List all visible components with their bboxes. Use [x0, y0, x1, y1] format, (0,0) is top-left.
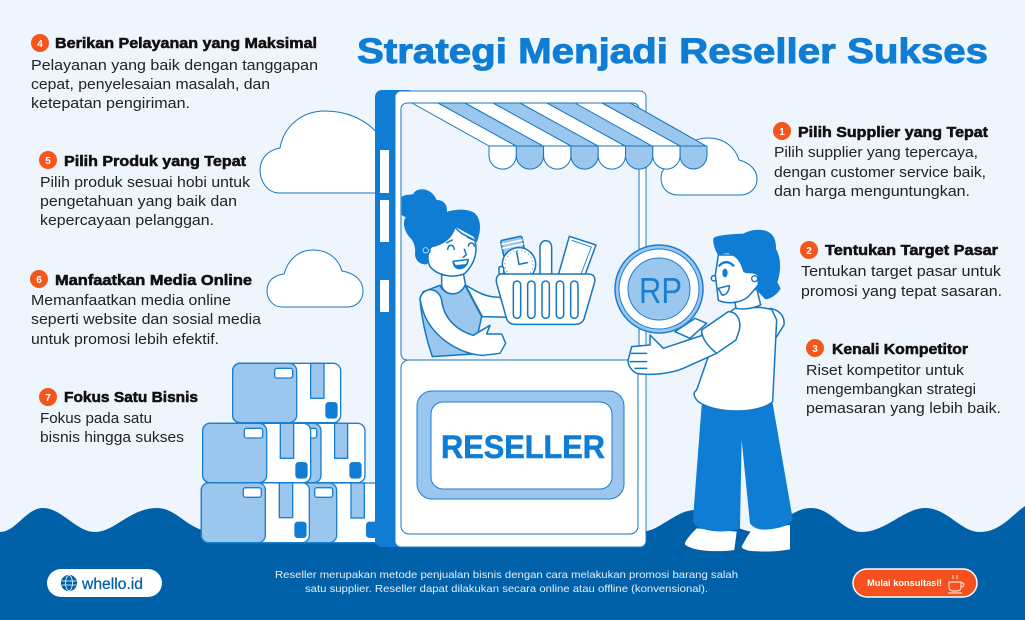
tip 1: 1 — [779, 127, 785, 138]
tip 7: 7 — [45, 393, 51, 404]
box: bottom right — [273, 483, 386, 543]
man sleeve — [702, 312, 740, 353]
title: Strategi Menjadi Reseller Sukses — [357, 32, 988, 71]
tip 7: Fokus pada satu — [40, 411, 152, 427]
man shirt — [694, 307, 777, 411]
box: top — [233, 363, 341, 423]
tip 1: dan harga menguntungkan. — [774, 184, 970, 200]
tip 6: Manfaatkan Media Online — [55, 272, 252, 289]
icon: watch — [499, 236, 536, 281]
logo pill: whello.id: whello.id — [81, 576, 143, 593]
tip 5: Pilih produk sesuai hobi untuk — [40, 175, 251, 191]
icon: globe — [62, 576, 76, 590]
call to action button: Mulai konsultasi! — [867, 578, 942, 588]
tip 2: promosi yang tepat sasaran. — [801, 284, 1002, 300]
shop frame — [395, 91, 646, 547]
man with magnifier — [628, 230, 793, 552]
magnifier lens — [615, 245, 703, 333]
awning — [412, 103, 707, 169]
cloud: right behind awning — [661, 138, 757, 195]
man hand fingers — [630, 353, 647, 368]
stacked boxes — [201, 363, 386, 543]
shop counter — [401, 360, 638, 534]
reseller sign — [417, 391, 624, 499]
tip 2: Tentukan target pasar untuk — [801, 264, 1002, 280]
icon: coffee cup — [948, 575, 964, 593]
tip 7 — [39, 388, 198, 446]
tip 6: seperti website dan sosial media — [31, 312, 262, 328]
cloud: middle left — [267, 250, 363, 307]
shop side slots — [380, 150, 389, 312]
logo pill: whello.id — [47, 569, 162, 597]
shop window — [401, 103, 639, 360]
call to action button — [853, 569, 977, 597]
tip 4: ketepatan pengiriman. — [31, 96, 190, 112]
tip 1: dengan customer service baik, — [774, 165, 986, 181]
tip 5: Pilih Produk yang Tepat — [64, 153, 246, 170]
footer description — [275, 569, 738, 595]
woman hair — [402, 189, 480, 264]
tip 2: 2 — [806, 246, 812, 257]
tip 1: Pilih Supplier yang Tepat — [798, 124, 988, 141]
footer description: Reseller merupakan metode penjualan bisnis dengan cara melakukan promosi barang salah — [275, 569, 738, 581]
tip 3: Riset kompetitor untuk — [806, 363, 965, 379]
man trousers — [693, 403, 793, 531]
tip 5 — [39, 151, 251, 229]
tip 3: pemasaran yang lebih baik. — [806, 401, 1001, 417]
tip 1 — [773, 122, 988, 200]
tip 3: 3 — [812, 344, 818, 355]
cloud: upper left — [260, 111, 380, 193]
tip 2: Tentukan Target Pasar — [825, 242, 998, 259]
man right arm — [675, 318, 707, 338]
tip 4 — [31, 34, 318, 112]
man shoes — [685, 525, 790, 552]
man far shoulder — [770, 308, 784, 339]
tip 7: Fokus Satu Bisnis — [64, 389, 198, 406]
tip 6: Memanfaatkan media online — [31, 293, 231, 309]
woman right arm — [466, 285, 512, 317]
basket with goods — [496, 236, 596, 324]
tip 4: cepat, penyelesaian masalah, dan — [31, 77, 270, 93]
shop side panel — [375, 90, 415, 547]
box: middle left — [203, 423, 311, 483]
tip 5: 5 — [45, 156, 51, 167]
tip 6: untuk promosi lebih efektif. — [31, 332, 219, 348]
basket body — [496, 274, 595, 324]
woman seller — [402, 189, 512, 357]
tip 7: bisnis hingga sukses — [40, 430, 184, 446]
tip 4: Berikan Pelayanan yang Maksimal — [55, 35, 317, 52]
tip 2 — [800, 241, 1002, 300]
tip 3: Kenali Kompetitor — [832, 341, 968, 358]
icon: phone — [558, 236, 596, 275]
tip 6 — [30, 270, 262, 348]
tip 6: 6 — [36, 275, 42, 286]
wave footer background — [0, 506, 1025, 620]
tip 3 — [806, 339, 1001, 417]
tip 1: Pilih supplier yang tepercaya, — [774, 145, 978, 161]
footer description: satu supplier. Reseller dapat dilakukan secara online atau offline (konvensional). — [305, 583, 708, 595]
tip 4: Pelayanan yang baik dengan tanggapan — [31, 58, 318, 74]
woman left arm — [420, 290, 506, 355]
box: bottom left — [201, 483, 309, 543]
reseller sign: RESELLER — [441, 429, 605, 465]
tip 4: 4 — [37, 39, 43, 50]
man head — [711, 230, 781, 309]
icon: bottle — [540, 241, 552, 275]
tip 5: kepercayaan pelanggan. — [40, 213, 214, 229]
box: middle right — [257, 423, 365, 483]
woman top — [420, 285, 482, 357]
man left arm and hand — [628, 335, 717, 374]
woman face — [422, 227, 476, 294]
tip 5: pengetahuan yang baik dan — [40, 194, 237, 210]
shop stall — [375, 90, 646, 547]
magnifier lens: RP — [639, 270, 682, 311]
tip 3: mengembangkan strategi — [806, 382, 976, 398]
